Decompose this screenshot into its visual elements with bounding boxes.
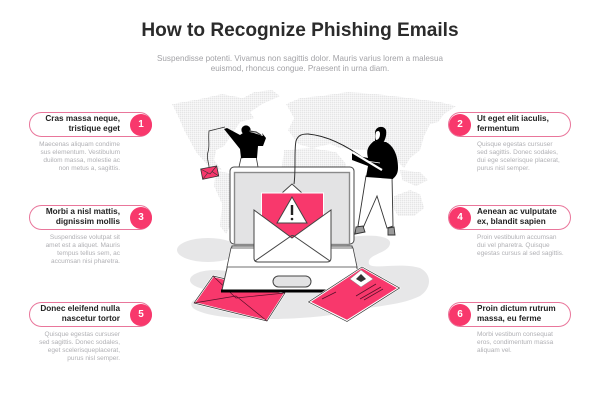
arm highlight (366, 161, 380, 163)
text 3: accumsan nisi pharetra. (51, 258, 120, 265)
badge 5 (130, 304, 152, 326)
badge 2: 2 (457, 118, 463, 130)
text 2 (477, 140, 560, 172)
text 4: Proin vestibulum accumsan (477, 234, 556, 240)
heading 1: Cras massa neque, (45, 114, 120, 122)
text 2: dui ege scelerisque placerat, (477, 157, 560, 164)
hook (282, 184, 302, 193)
heading 5: Donec eleifend nulla (40, 304, 120, 312)
title: How to Recognize Phishing Emails (141, 20, 459, 41)
badge 6 (449, 304, 471, 326)
text 4: egestas cursus al sed sagittis. (477, 250, 564, 257)
head (375, 127, 386, 143)
text 3 (46, 234, 120, 265)
panel: item 2 (448, 112, 571, 172)
text 6: aliquam vel. (477, 347, 512, 354)
badge 3 (130, 206, 152, 228)
text 5: sed sagittis. Donec sodales, (39, 339, 120, 346)
laptop base (222, 246, 362, 290)
text 2: Quisque egestas cursuser (477, 140, 553, 148)
text 1: Maecenas aliquam condime (39, 140, 120, 148)
text 2: purus nisl semper. (477, 165, 530, 172)
heading 3: Morbi a nisl mattis, (46, 206, 120, 216)
screen (230, 167, 354, 244)
panel: item 6 (448, 302, 571, 354)
body (352, 141, 398, 179)
text 5: purus nisl semper. (67, 355, 120, 362)
dotted world map (172, 90, 456, 234)
heading 3 (46, 206, 120, 226)
legs (239, 156, 258, 167)
heading 2: Ut eget elit iaculis, (477, 114, 549, 122)
fishing rod (308, 134, 366, 160)
badge 6: 6 (457, 308, 463, 320)
email with warning (254, 134, 331, 262)
badge 4 (449, 206, 471, 228)
heading 2 (477, 114, 549, 132)
pill 6 (448, 302, 571, 327)
heading 3: dignissim mollis (56, 216, 120, 226)
text 6: eros, condimentum massa (477, 339, 553, 346)
subtitle: euismod, rhoncus congue. Praesent in urna diam. (211, 64, 389, 73)
panel: item 3 (29, 205, 152, 265)
envelope body (254, 210, 331, 262)
heading 5 (40, 304, 120, 322)
heading 6 (477, 304, 556, 322)
warning triangle (277, 197, 307, 223)
subtitle (157, 54, 443, 73)
badge 3: 3 (138, 212, 144, 222)
pill 2 (448, 112, 571, 137)
subtitle: Suspendisse potenti. Vivamus non sagittis dolor. Mauris varius lorem a malesua (157, 54, 443, 62)
heading 4: Aenean ac vulputate (477, 206, 557, 216)
line and bait (207, 127, 225, 167)
pill 1 (29, 112, 152, 137)
badge 1: 1 (138, 118, 144, 130)
panel: item 1 (29, 112, 152, 172)
text 6 (477, 330, 554, 354)
heading 1: tristique eget (69, 124, 120, 132)
text 5: Quisque egestas cursuser (44, 330, 120, 338)
text 1 (39, 140, 120, 172)
panel: item 5 (29, 302, 152, 362)
text 1: non metus a, sagittis. (59, 165, 120, 172)
text 4: dui vel pharetra. Quisque (477, 242, 550, 249)
laptop (221, 167, 363, 291)
small fisherman (201, 125, 266, 179)
badge 4: 4 (457, 212, 463, 222)
text 1: duilom massa, molestie ac (43, 157, 120, 164)
heading 4 (477, 206, 557, 226)
shoes (355, 226, 395, 235)
heading 5: nascetur tortor (62, 314, 120, 322)
text 1: sus elementum. Vestibulum (41, 149, 120, 156)
big fisherman (308, 127, 398, 235)
floor shadows (177, 236, 429, 319)
heading 6: massa, eu ferme (477, 314, 541, 322)
stamp (350, 270, 373, 287)
text 3: amet est a aliquet. Mauris (46, 242, 120, 249)
postcard (308, 267, 400, 322)
text 2: sed sagittis. Donec sodales, (477, 149, 558, 156)
panel: item 4 (448, 205, 571, 257)
red envelope on floor (194, 276, 285, 321)
head (241, 125, 251, 135)
touchpad (273, 276, 311, 287)
legs (358, 176, 393, 228)
text 3: tempus tellus sem, ac (57, 250, 120, 257)
text 3: Suspendisse volutpat sit (50, 234, 120, 240)
badge 5: 5 (138, 308, 144, 320)
red letter (262, 193, 324, 239)
heading 1 (45, 114, 120, 132)
heading 4: ex, blandit sapien (477, 216, 546, 226)
pill 5 (29, 302, 152, 327)
body and arms (224, 128, 266, 158)
text 5 (39, 330, 120, 362)
fishing line (294, 134, 308, 184)
pill 4 (448, 205, 571, 230)
icon: small envelope bait (201, 166, 219, 179)
badge 2 (449, 114, 471, 136)
pill 3 (29, 205, 152, 230)
text 5: eget scelerisqueplacerat, (48, 347, 120, 354)
text 6: Morbi vestibum consequat (477, 330, 553, 338)
heading 2: fermentum (477, 124, 519, 132)
heading 6: Proin dictum rutrum (477, 304, 556, 312)
badge 1 (130, 114, 152, 136)
text 4 (477, 234, 564, 257)
